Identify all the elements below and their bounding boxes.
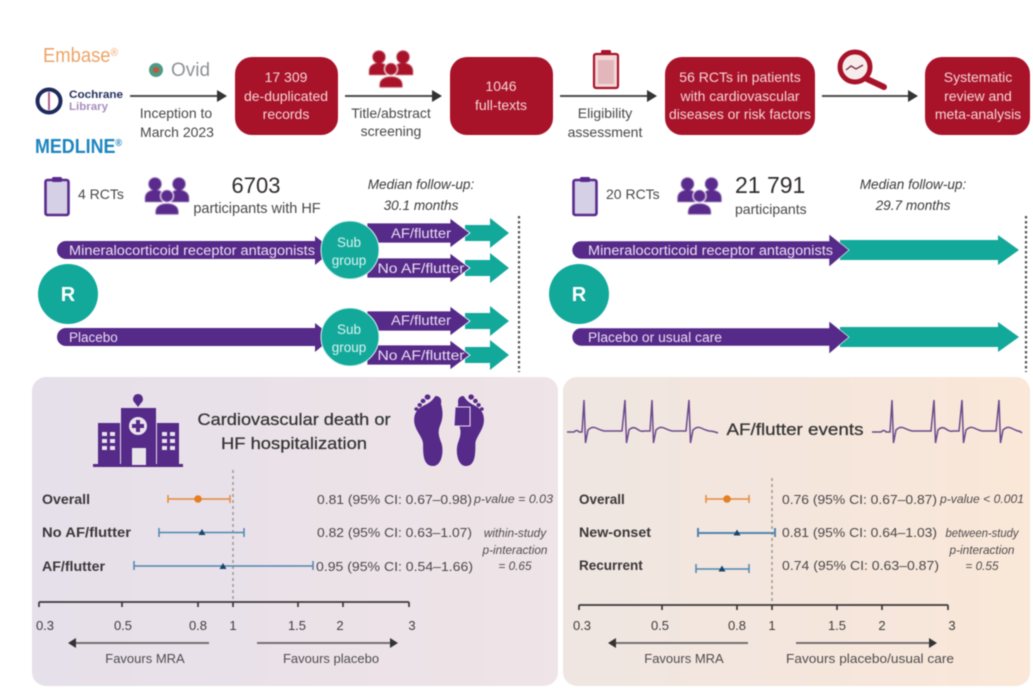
right randomization diagram <box>549 234 1019 354</box>
arrow: favours placebo: Favours placebo <box>283 651 379 666</box>
subgroup circle: placebo: group <box>332 340 366 355</box>
text: median follow-up: Median follow-up: <box>368 177 474 192</box>
source: Ovid logo: Ovid <box>171 60 210 81</box>
forest axis: 0.5 <box>114 618 132 633</box>
text: participant count <box>193 173 321 217</box>
icon: feet with toe tag <box>414 394 484 466</box>
text: median follow-up <box>368 177 474 213</box>
heading: outcome <box>198 410 391 453</box>
text: within-study interaction: = 0.65 <box>498 559 532 573</box>
arrow: favours MRA: Favours MRA <box>105 651 185 666</box>
heading: outcome: HF hospitalization <box>221 434 367 453</box>
forest row: overall: Overall <box>579 492 625 507</box>
label: search period: Inception to <box>140 105 212 121</box>
arrow: screening <box>345 90 442 102</box>
panel: cardiovascular death or HF hospitalization <box>32 377 558 686</box>
forest axis: 0.8 <box>189 618 207 633</box>
subgroup circle: placebo: Sub <box>337 322 361 337</box>
arrow: MRA follow-up <box>840 235 1019 265</box>
arrow: eligibility <box>560 90 657 102</box>
arrow: favours placebo <box>257 638 398 666</box>
forest row: overall: p-value = 0.03 <box>473 492 553 506</box>
forest row: overall: p-value < 0.001 <box>939 492 1024 506</box>
text: participant count: 21 791 <box>735 172 805 198</box>
icon: ECG trace left <box>567 400 718 443</box>
box: full-texts: full-texts <box>475 97 527 113</box>
box: full-texts: 1046 <box>485 78 517 94</box>
forest row: overall <box>579 492 1024 507</box>
forest row: AF/flutter <box>42 559 473 574</box>
heading: outcome: Cardiovascular death or <box>198 410 391 429</box>
arrow: control follow-up <box>840 322 1019 352</box>
label: title/abstract screening <box>351 105 431 139</box>
forest axis <box>573 605 956 633</box>
forest axis: 3 <box>408 618 416 633</box>
box: de-duplicated records: 17 309 <box>265 69 308 85</box>
forest row: overall: 0.76 (95% CI: 0.67–0.87) <box>782 492 937 507</box>
forest axis: 0.3 <box>36 618 54 633</box>
icon: randomization <box>38 264 98 324</box>
box: systematic review: review and <box>944 88 1012 104</box>
icon: hospital <box>93 394 183 467</box>
label: title/abstract screening: Title/abstract <box>351 105 431 121</box>
subgroup arrows: placebo: No AF/flutter <box>378 348 465 363</box>
icon: randomization <box>549 264 609 324</box>
subgroup arrows: MRA: No AF/flutter <box>378 261 465 276</box>
box: de-duplicated records: records <box>263 106 309 122</box>
arrow: placebo arm: Placebo <box>69 330 118 345</box>
text: participant count: participants <box>735 201 807 217</box>
box: included RCTs: 56 RCTs in patients <box>679 69 801 85</box>
subgroup circle: MRA: group <box>332 253 366 268</box>
forest axis: 0.8 <box>728 618 746 633</box>
forest axis <box>36 602 416 633</box>
forest row: overall: 0.81 (95% CI: 0.67–0.98) <box>317 492 472 507</box>
source: Embase logo: Embase <box>43 45 116 67</box>
forest axis: 3 <box>948 618 956 633</box>
box: included RCTs: diseases or risk factors <box>669 106 811 122</box>
subgroup circle: placebo <box>321 308 379 366</box>
forest axis: 0.5 <box>651 618 669 633</box>
icon: red clipboard <box>594 50 618 88</box>
icon: participants <box>676 176 723 216</box>
subgroup arrows: MRA: AF/flutter <box>391 226 452 241</box>
left randomization diagram <box>38 218 509 370</box>
forest axis: 1 <box>229 618 237 633</box>
forest row: overall: Overall <box>42 492 90 507</box>
label: title/abstract screening: screening <box>361 123 421 139</box>
source: Cochrane Library logo <box>38 89 123 113</box>
arrow: analysis <box>822 90 918 102</box>
source: MEDLINE logo: ® <box>115 138 123 149</box>
text: participant count: 6703 <box>232 173 280 198</box>
box: systematic review: Systematic <box>944 69 1012 85</box>
box: systematic review <box>925 57 1030 135</box>
forest row: new-onset: 0.81 (95% CI: 0.64–1.03) <box>782 525 937 540</box>
forest axis: 1.5 <box>288 618 306 633</box>
box: systematic review: meta-analysis <box>935 106 1021 122</box>
arrow: MRA arm <box>57 236 333 265</box>
box: included RCTs: with cardiovascular <box>679 88 800 104</box>
arrow: favours MRA <box>68 638 209 666</box>
text: median follow-up: 29.7 months <box>875 198 951 213</box>
forest row: no AF/flutter: No AF/flutter <box>42 525 132 540</box>
arrow: MRA arm: Mineralocorticoid receptor antagonists <box>69 243 315 258</box>
subgroup circle: MRA <box>321 221 379 279</box>
text: RCT count: 20 RCTs <box>606 186 660 202</box>
label: eligibility assessment <box>568 105 642 140</box>
forest row: AF/flutter: AF/flutter <box>42 559 106 574</box>
forest row: AF/flutter: 0.95 (95% CI: 0.54–1.66) <box>316 559 473 574</box>
arrow: placebo or usual care arm: Placebo or usual care <box>588 330 722 345</box>
forest row: new-onset: between-study <box>946 526 1020 540</box>
forest axis: 2 <box>336 618 344 633</box>
right trial summary <box>574 172 966 217</box>
arrow: placebo arm <box>57 323 333 352</box>
box: de-duplicated records <box>235 57 338 135</box>
text: within-study interaction: p-interaction <box>482 543 548 557</box>
icon: randomization: R <box>61 284 76 306</box>
icon: randomization: R <box>572 284 587 306</box>
forest row: new-onset: New-onset <box>579 525 652 540</box>
label: eligibility assessment: assessment <box>568 124 642 140</box>
forest row: recurrent: Recurrent <box>579 558 643 573</box>
subgroup arrows: placebo: AF/flutter <box>391 313 452 328</box>
source: Cochrane Library logo: Cochrane <box>69 89 123 101</box>
arrow: favours MRA: Favours MRA <box>644 651 724 666</box>
forest axis: 1.5 <box>828 618 846 633</box>
forest row: new-onset <box>579 525 1020 540</box>
arrow: favours placebo/usual care: Favours placebo/usual care <box>786 651 954 666</box>
text: between-study interaction: p-interaction <box>949 543 1015 557</box>
box: included RCTs <box>665 57 815 135</box>
text: participant count <box>735 172 807 217</box>
forest row: no AF/flutter <box>42 525 547 540</box>
text: median follow-up <box>860 177 966 213</box>
arrow: search to records <box>130 90 227 102</box>
arrow: MRA arm: Mineralocorticoid receptor antagonists <box>588 243 833 258</box>
forest row: recurrent: 0.74 (95% CI: 0.63–0.87) <box>782 558 939 573</box>
text: median follow-up: 30.1 months <box>384 198 459 213</box>
text: median follow-up: Median follow-up: <box>860 177 966 192</box>
source: Embase logo: ® <box>111 47 118 59</box>
arrow: favours placebo/usual care <box>786 638 954 666</box>
subgroup arrows: placebo <box>367 306 509 370</box>
forest row: overall <box>42 492 553 507</box>
arrow: MRA arm <box>572 234 849 267</box>
forest row: no AF/flutter: 0.82 (95% CI: 0.63–1.07) <box>317 525 472 540</box>
label: search period <box>140 105 214 140</box>
box: de-duplicated records: de-duplicated <box>244 88 328 104</box>
icon: participants <box>144 176 190 216</box>
heading: outcome: AF/flutter events <box>726 420 864 439</box>
subgroup circle: MRA: Sub <box>337 235 361 250</box>
forest row: recurrent <box>579 558 939 573</box>
forest row: no AF/flutter: within-study <box>484 526 547 540</box>
label: eligibility assessment: Eligibility <box>578 105 632 121</box>
source: Cochrane Library logo: Library <box>69 101 109 113</box>
text: between-study interaction: = 0.55 <box>965 559 999 573</box>
icon: purple clipboard <box>574 177 596 215</box>
box: full-texts <box>450 57 553 135</box>
forest axis: 2 <box>878 618 886 633</box>
icon: magnifier <box>840 52 884 87</box>
source: MEDLINE logo: MEDLINE <box>35 136 125 158</box>
text: within-study interaction <box>482 543 548 573</box>
subgroup arrows: MRA <box>367 218 509 283</box>
icon: ECG trace right <box>872 400 1022 443</box>
source: Ovid logo <box>149 60 210 81</box>
forest axis: 0.3 <box>573 618 591 633</box>
left trial summary <box>46 173 474 217</box>
arrow: placebo or usual care arm <box>572 321 849 354</box>
forest axis: 1 <box>768 618 776 633</box>
text: participant count: participants with HF <box>193 201 321 217</box>
icon: purple clipboard <box>46 177 68 215</box>
panel: AF/flutter events <box>563 377 1030 686</box>
text: between-study interaction <box>949 543 1015 573</box>
label: search period: March 2023 <box>140 124 214 140</box>
icon: reviewers <box>368 49 414 89</box>
arrow: favours MRA <box>608 638 748 666</box>
text: RCT count: 4 RCTs <box>78 186 124 202</box>
